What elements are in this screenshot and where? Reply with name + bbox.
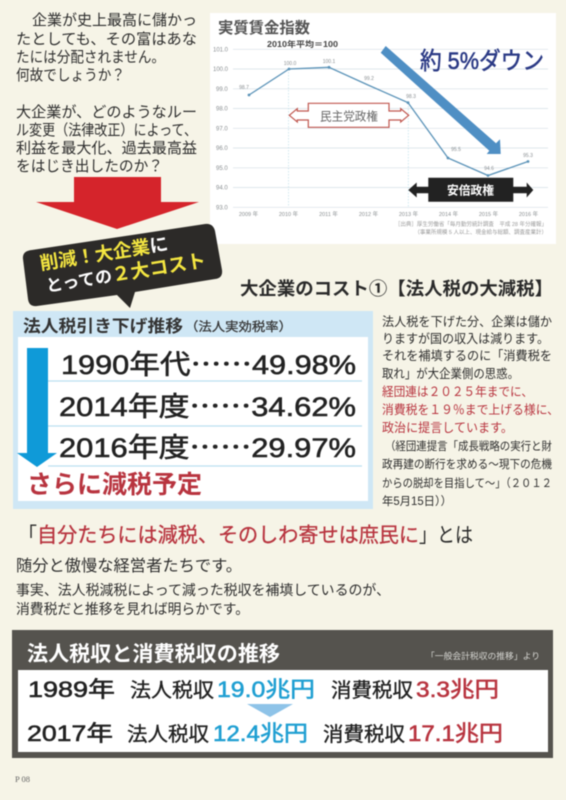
x axis labels: 2012 年 bbox=[359, 210, 379, 218]
wage index line: 100.0 bbox=[284, 61, 296, 67]
statement: tax cuts for us, burden on the people: 「 bbox=[18, 524, 37, 547]
row: 2017: 消費税収 bbox=[323, 723, 405, 746]
text block: arrogant executives: 事実、法人税減税によって減った税収を補填しているのが、 bbox=[16, 582, 390, 598]
intro text block: たには分配されません。 bbox=[16, 49, 165, 66]
intro text block: たとしても、その富はあな bbox=[16, 31, 197, 48]
intro text block: 何故でしょうか？ bbox=[16, 67, 125, 84]
wage index line: 95.5 bbox=[451, 147, 461, 153]
row: 2016 rate: 2016年度 …… 29.97% bbox=[59, 426, 356, 465]
text block: explanation of corporate tax cuts: からの脱却を目指して～」（２０１２ bbox=[382, 476, 552, 490]
row: 2017: 法人税収 bbox=[127, 723, 209, 746]
further cuts planned: さらに減税予定 bbox=[27, 471, 202, 499]
row: 2017: 12.4兆円 bbox=[213, 721, 308, 746]
callout: about 5% down: 約 5%ダウン bbox=[420, 48, 544, 75]
wage index line: 98.7 bbox=[239, 85, 249, 91]
x axis labels: 2013 年 bbox=[399, 210, 419, 218]
x axis labels bbox=[239, 210, 539, 218]
wage index line bbox=[239, 59, 533, 177]
chart source note: （事業所規模 5 人以上、現金給与総額、調査産業計） bbox=[414, 228, 547, 236]
text block: explanation of corporate tax cuts: りますが国の収入は減ります。 bbox=[382, 331, 549, 346]
label: DPJ government span bbox=[289, 103, 409, 127]
label: Abe government span bbox=[408, 178, 533, 202]
text block: explanation of corporate tax cuts: 年5月15日）） bbox=[382, 494, 452, 508]
x axis labels: 2016 年 bbox=[519, 210, 539, 218]
grid lines and y axis labels: 95.0 bbox=[216, 166, 228, 172]
row: 2017 bbox=[27, 721, 503, 746]
heading: corporate cost 1: 大企業のコスト①【法人税の大減税】 bbox=[240, 278, 553, 299]
callout: two big costs bubble bbox=[23, 224, 222, 308]
wage index line: 98.3 bbox=[406, 94, 416, 100]
arrow: red down arrow bbox=[36, 177, 199, 229]
wage index line: 100.1 bbox=[323, 59, 335, 65]
text block: explanation of corporate tax cuts: 政治に提言しています。 bbox=[382, 420, 513, 435]
label: DPJ government span: 民主党政権 bbox=[320, 108, 378, 124]
text block: explanation of corporate tax cuts: 消費税を１９％まで上げる様に、 bbox=[382, 402, 559, 417]
panel subtitle: （法人実効税率） bbox=[185, 319, 292, 334]
text block: arrogant executives: 消費税だと推移を見れば明らかです。 bbox=[16, 601, 249, 617]
grid lines and y axis labels bbox=[213, 47, 548, 211]
text block: arrogant executives: 随分と傲慢な経営者たちです。 bbox=[16, 556, 242, 575]
row: 2017: 17.1兆円 bbox=[408, 721, 503, 746]
statement: tax cuts for us, burden on the people: 自分たちには減税、そのしわ寄せは庶民に bbox=[37, 524, 419, 547]
grid lines and y axis labels: 98.0 bbox=[216, 106, 228, 112]
row: 1989: 1989年 bbox=[28, 677, 115, 702]
panel: real wage index chart bbox=[210, 13, 556, 244]
chart source note bbox=[395, 220, 547, 236]
chart source note: ［出典］厚生労働省「毎月勤労統計調査 平成 28 年分確報」 bbox=[395, 220, 547, 228]
intro text block: 利益を最大化、過去最高益 bbox=[16, 140, 197, 157]
row: 1989: 消費税収 bbox=[331, 679, 413, 702]
wage index line: 99.2 bbox=[364, 76, 374, 82]
x axis labels: 2009 年 bbox=[239, 210, 259, 218]
row: 1989: 19.0兆円 bbox=[217, 677, 315, 702]
arrow: light blue triangle bbox=[247, 704, 293, 717]
row: 2017: 2017年 bbox=[27, 721, 113, 746]
text block: explanation of corporate tax cuts: （経団連提言「成長戦略の実行と財 bbox=[385, 439, 552, 453]
intro text block: 企業が史上最高に儲かっ bbox=[32, 12, 197, 29]
grid lines and y axis labels: 100.0 bbox=[213, 67, 229, 73]
wage index line: 94.6 bbox=[484, 166, 494, 172]
panel: corporate vs consumption tax revenue bbox=[12, 630, 553, 758]
grid lines and y axis labels: 101.0 bbox=[213, 47, 229, 53]
arrow: downward trend bbox=[381, 46, 501, 154]
arrow: blue downward bbox=[17, 348, 57, 467]
callout: two big costs bubble: 削減！大企業に bbox=[38, 233, 170, 274]
x axis labels: 2010 年 bbox=[279, 210, 299, 218]
row: 1989: 法人税収 bbox=[130, 679, 214, 702]
text block: explanation of corporate tax cuts: 取れ」が大企業側の思惑。 bbox=[382, 366, 519, 381]
callout: two big costs bubble: とっての２大コスト bbox=[44, 250, 207, 297]
label: Abe government span: 安倍政権 bbox=[447, 182, 494, 198]
grid lines and y axis labels: 96.0 bbox=[216, 146, 228, 152]
source note: 「一般会計税収の推移」より bbox=[426, 651, 540, 661]
wage index line: 95.3 bbox=[523, 153, 533, 159]
intro text block: 大企業が、どのようなルー bbox=[16, 104, 197, 121]
statement: tax cuts for us, burden on the people: 」とは bbox=[419, 524, 473, 547]
grid lines and y axis labels: 97.0 bbox=[216, 126, 228, 132]
row: 1989 bbox=[28, 677, 499, 702]
chart title: 実質賃金指数 bbox=[218, 18, 310, 37]
x axis labels: 2014 年 bbox=[439, 210, 459, 218]
chart baseline note: 2010年平均＝100 bbox=[267, 39, 339, 49]
grid lines and y axis labels: 94.0 bbox=[216, 186, 228, 192]
panel title: 法人税収と消費税収の推移 bbox=[27, 643, 280, 666]
text block: explanation of corporate tax cuts: 政再建の断行を求める～現下の危機 bbox=[382, 457, 552, 471]
text block: explanation of corporate tax cuts: 法人税を下げた分、企業は儲か bbox=[382, 314, 552, 329]
text block: explanation of corporate tax cuts bbox=[382, 314, 559, 508]
panel: corporate tax cuts bbox=[13, 311, 373, 509]
row: 2014 rate: 2014年度 …… 34.62% bbox=[59, 385, 356, 424]
row: 1990s rate: 1990年代 …… 49.98% bbox=[61, 343, 356, 382]
x axis labels: 2015 年 bbox=[479, 210, 499, 218]
intro text block: をはじき出したのか？ bbox=[16, 158, 163, 175]
page number: P 08 bbox=[15, 774, 30, 784]
row: 1989: 3.3兆円 bbox=[416, 677, 499, 702]
x axis labels: 2011 年 bbox=[319, 210, 338, 218]
grid lines and y axis labels: 99.0 bbox=[216, 87, 228, 93]
text block: arrogant executives bbox=[16, 556, 390, 617]
text block: explanation of corporate tax cuts: 経団連は２０２５年までに、 bbox=[382, 385, 533, 399]
text block: explanation of corporate tax cuts: それを補填するのに「消費税を bbox=[382, 348, 552, 363]
intro text block: ル変更（法律改正）によって、 bbox=[16, 122, 197, 139]
panel title: 法人税引き下げ推移 bbox=[23, 317, 183, 336]
grid lines and y axis labels: 93.0 bbox=[216, 205, 228, 211]
intro text block bbox=[16, 12, 197, 175]
